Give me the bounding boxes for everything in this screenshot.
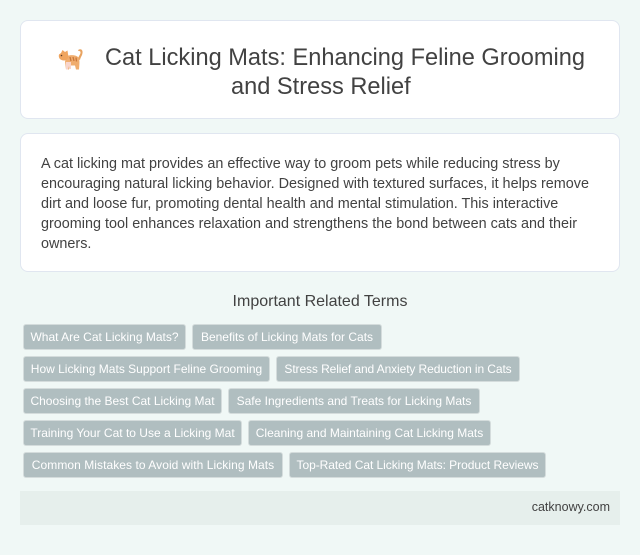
heading: Cat Licking Mats: Enhancing Feline Grooming <box>105 45 585 71</box>
text block: description <box>41 156 589 252</box>
text block: description: encouraging natural licking behavior. Designed with textured surfaces, it helps remove <box>41 176 589 192</box>
tag: Common Mistakes to Avoid with Licking Mats <box>32 458 274 472</box>
tag: Stress Relief and Anxiety Reduction in Cats <box>284 362 512 376</box>
icon: cat <box>58 49 83 70</box>
tag <box>289 452 546 478</box>
text block: description: dirt and loose fur, promoting dental health and mental stimulation. This interactive <box>41 196 558 212</box>
tag <box>23 356 270 382</box>
heading <box>105 45 585 100</box>
tag: Training Your Cat to Use a Licking Mat <box>30 426 235 440</box>
text block: description: A cat licking mat provides an effective way to groom pets while reducing stress by <box>41 156 560 172</box>
panel: related term tags <box>23 324 546 478</box>
tag <box>23 420 242 446</box>
tag: What Are Cat Licking Mats? <box>30 330 179 344</box>
tag <box>228 388 480 414</box>
footer <box>20 491 620 525</box>
tag <box>23 452 283 478</box>
tag <box>192 324 382 350</box>
tag: Benefits of Licking Mats for Cats <box>201 330 373 344</box>
tag: Top-Rated Cat Licking Mats: Product Reviews <box>297 458 538 472</box>
tag: Cleaning and Maintaining Cat Licking Mats <box>256 426 483 440</box>
footer: catknowy.com <box>532 500 610 514</box>
tag <box>248 420 491 446</box>
text block: description: owners. <box>41 236 91 252</box>
panel: description card <box>20 133 620 272</box>
text block: description: grooming tool enhances relaxation and strengthens the bond between cats and their <box>41 216 577 232</box>
tag: Choosing the Best Cat Licking Mat <box>30 394 215 408</box>
tag <box>23 324 186 350</box>
tag: Safe Ingredients and Treats for Licking Mats <box>237 394 471 408</box>
tag: How Licking Mats Support Feline Grooming <box>31 362 262 376</box>
tag <box>276 356 520 382</box>
heading: and Stress Relief <box>231 74 411 100</box>
tag <box>23 388 222 414</box>
heading: related terms: Important Related Terms <box>233 293 407 310</box>
panel: title card <box>20 20 620 119</box>
